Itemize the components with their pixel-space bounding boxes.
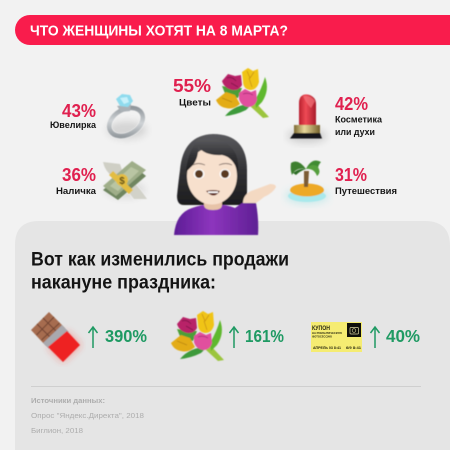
icon: palm island — [285, 161, 329, 204]
icon: money with wings: $ — [119, 176, 125, 187]
title banner — [15, 15, 450, 45]
data sources — [31, 396, 144, 435]
panel: sales changes background — [15, 221, 450, 450]
icon: coupon: ФОТОСЕССИЮ — [312, 334, 332, 338]
icon: tulip bouquet — [216, 68, 269, 118]
heading: sales changes: Вот как изменились продажи — [31, 250, 289, 270]
item: travel 31%: Путешествия — [335, 185, 397, 196]
heading: sales changes: накануне праздника: — [31, 272, 216, 294]
item: cash 36%: 36% — [62, 165, 96, 185]
data sources: Опрос "Яндекс.Директа", 2018 — [31, 411, 144, 420]
stat: flowers +161% — [230, 326, 284, 348]
icon: coupon: АПРЕЛЬ 03 8:41 — [313, 346, 341, 350]
item: cosmetics 42%: Косметика — [335, 114, 383, 124]
item: jewelry 43%: Ювелирка — [50, 119, 97, 130]
stat: chocolate +390%: 390% — [105, 326, 147, 346]
icon: woman tipping hand — [174, 134, 276, 235]
item: flowers 55%: Цветы — [179, 96, 211, 108]
icon: diamond ring — [104, 94, 148, 142]
item: cosmetics 42% — [335, 94, 383, 137]
icon: coupon — [311, 322, 362, 352]
icon: chocolate bar — [31, 312, 81, 362]
item: jewelry 43%: 43% — [62, 101, 96, 121]
icon: lipstick — [287, 94, 327, 143]
data sources: Биглион, 2018 — [31, 426, 83, 435]
item: jewelry 43% — [50, 101, 97, 130]
icon: tulip bouquet small — [171, 311, 224, 361]
item: flowers 55%: 55% — [173, 76, 211, 96]
item: flowers 55% — [173, 76, 211, 108]
item: travel 31%: 31% — [335, 165, 367, 185]
icon: coupon: КУПОН — [312, 326, 330, 332]
item: travel 31% — [335, 165, 397, 196]
icon: money with wings — [103, 161, 147, 200]
item: cosmetics 42%: или духи — [335, 126, 375, 137]
item: cash 36% — [56, 165, 97, 196]
stat: flowers +161%: 161% — [245, 326, 284, 346]
item: cosmetics 42%: 42% — [335, 94, 368, 114]
title banner: ЧТО ЖЕНЩИНЫ ХОТЯТ НА 8 МАРТА? — [30, 24, 288, 40]
stat: chocolate +390% — [88, 326, 147, 348]
stat: coupons +40%: 40% — [386, 326, 420, 346]
icon: coupon: 6/9 8:41 — [346, 346, 361, 350]
data sources: Источники данных: — [31, 396, 105, 405]
icon: coupon: НА РОМАНТИЧЕСКУЮ — [312, 331, 342, 335]
heading: sales changes — [31, 250, 289, 294]
stat: coupons +40% — [370, 326, 420, 348]
item: cash 36%: Наличка — [56, 185, 97, 196]
